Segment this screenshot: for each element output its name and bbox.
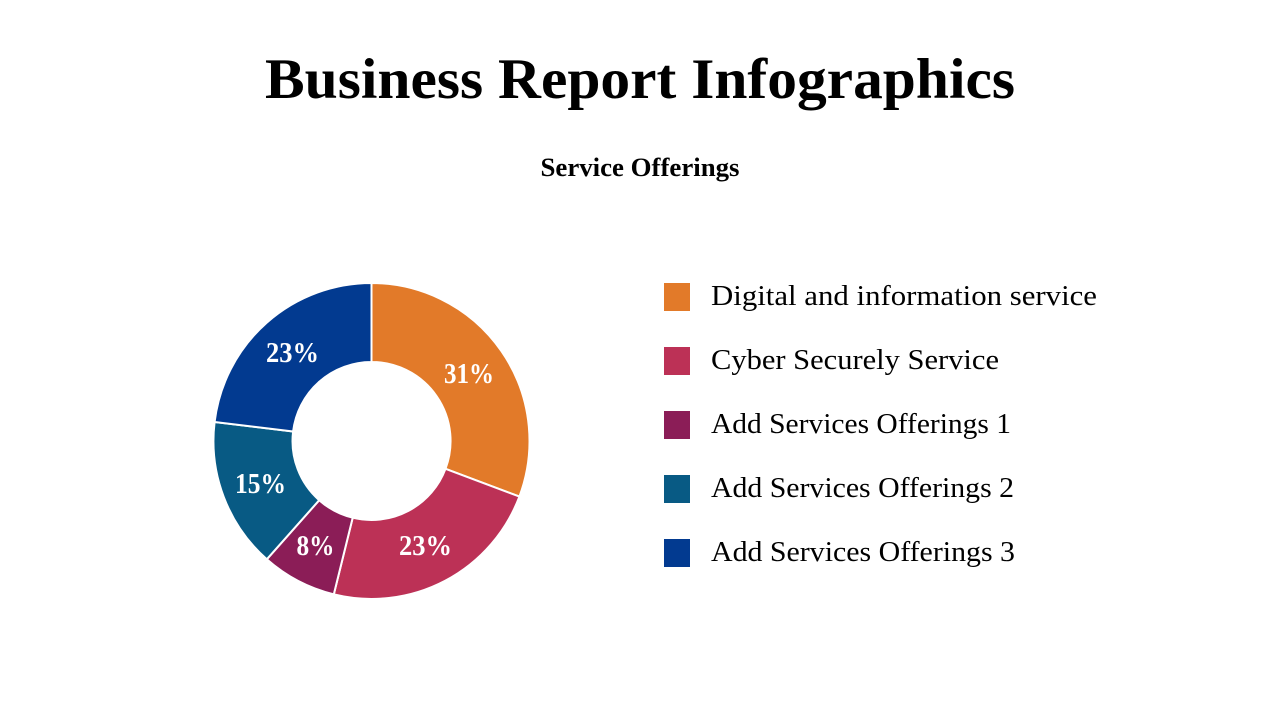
legend (664, 280, 1097, 568)
legend item: add services offerings 3: Add Services Offerings 3 (711, 536, 1015, 568)
segment: digital and information service 31% (372, 283, 530, 497)
legend item: add services offerings 2: Add Services Offerings 2 (711, 472, 1014, 504)
value: 23% cyber: 23% (399, 531, 452, 562)
segment: cyber securely service 23% (334, 469, 519, 599)
segment: add services offerings 1 8% (267, 500, 353, 594)
chart value labels (235, 338, 494, 562)
segment: add services offerings 3 23% (215, 283, 372, 432)
title: Business Report Infographics (265, 48, 1015, 111)
legend item: add services offerings 1: Add Services Offerings 1 (711, 408, 1011, 440)
legend item: digital and information service: Digital and information service (711, 280, 1097, 312)
value: 23% add services 3: 23% (266, 338, 319, 369)
donut chart (213, 283, 530, 599)
subtitle: Service Offerings (540, 153, 740, 182)
value: 15%: 15% (235, 469, 286, 500)
value: 31%: 31% (444, 359, 494, 390)
segment: add services offerings 2 15% (213, 422, 319, 559)
value: 8%: 8% (296, 531, 334, 562)
legend item: cyber securely service: Cyber Securely Service (711, 344, 999, 376)
